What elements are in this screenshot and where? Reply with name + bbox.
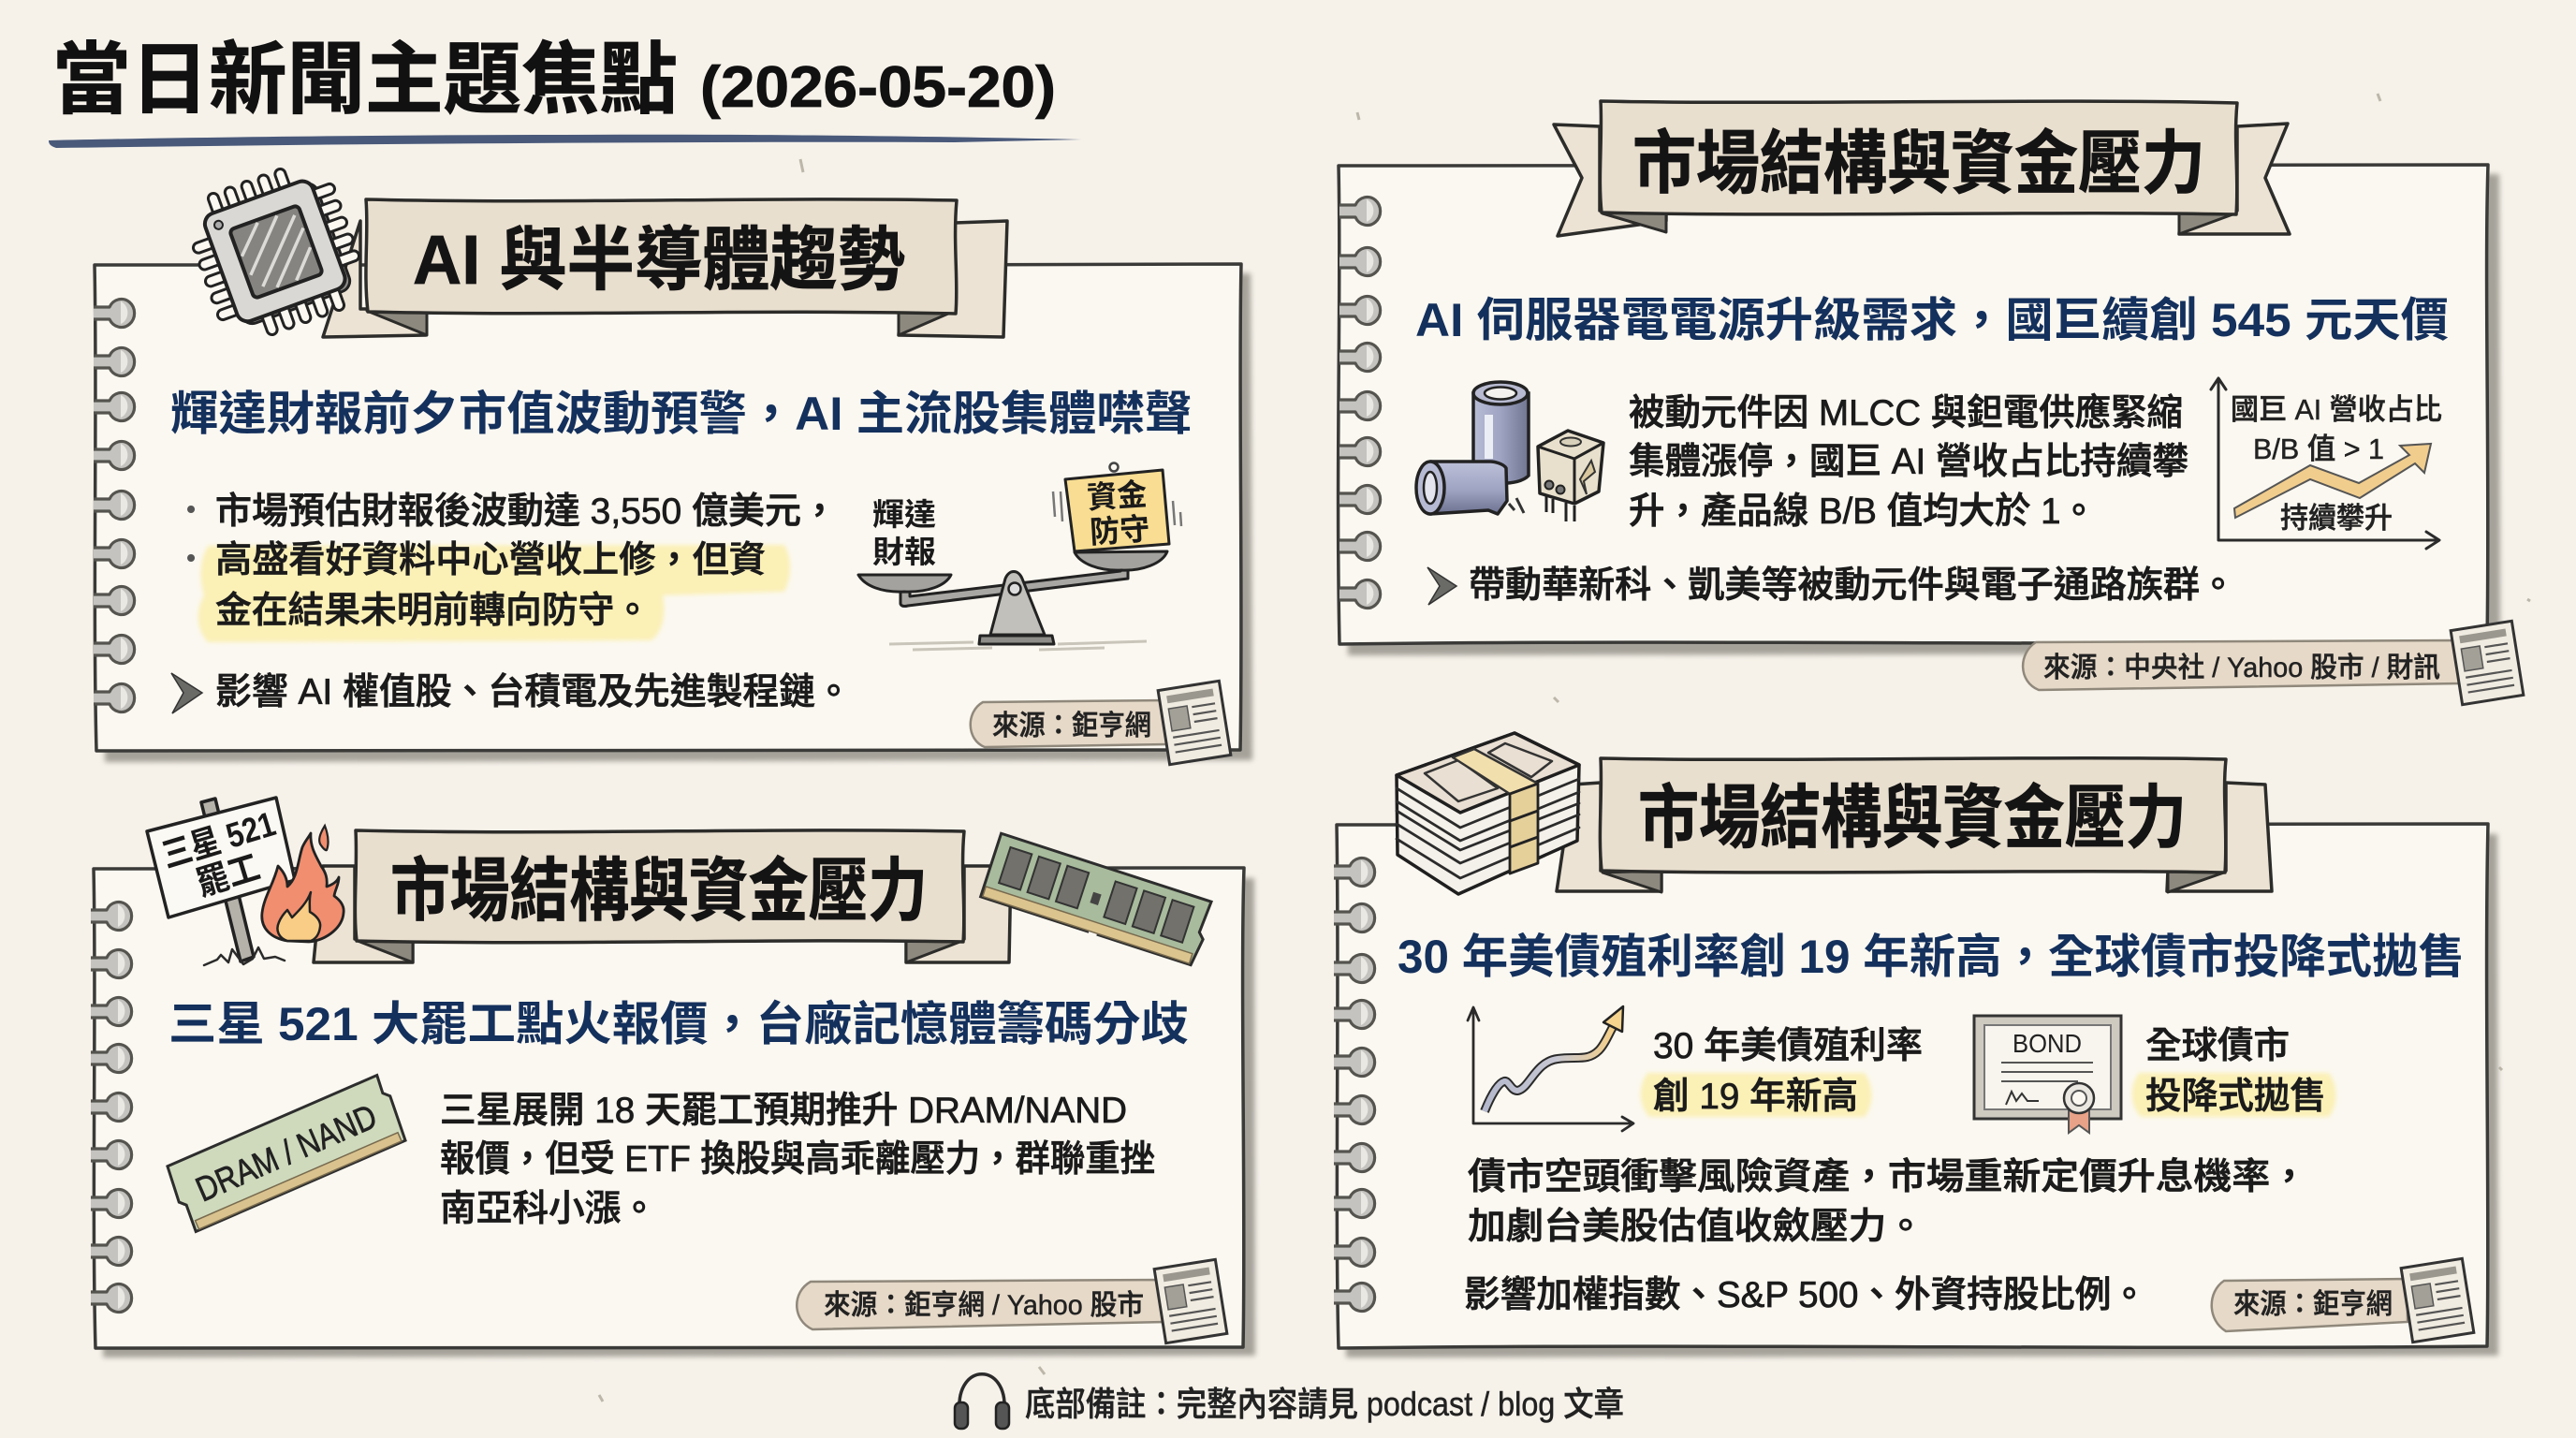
impact line: 影響 AI 權值股、台積電及先進製程鏈。	[215, 672, 852, 712]
highlighted text block: 金在結果未明前轉向防守。	[215, 591, 651, 631]
highlighted text block: 高盛看好資料中心營收上修，但資	[215, 540, 766, 580]
callout: capitulation: 投降式拋售	[2145, 1077, 2326, 1117]
icon: balance scale: 財報	[872, 535, 936, 569]
yellow highlight	[198, 545, 790, 642]
body text: 南亞科小漲。	[440, 1189, 657, 1229]
highlighted text block	[187, 492, 838, 642]
mini chart: 持續攀升: B/B 值 > 1	[2253, 433, 2384, 465]
panel: market structure, passive components	[1339, 101, 2524, 705]
body text	[440, 1091, 1155, 1229]
impact line: 影響加權指數、S&P 500、外資持股比例。	[1464, 1275, 2147, 1315]
icon: balance scale: 輝達	[872, 497, 936, 532]
body text: 集體漲停，國巨 AI 營收占比持續攀	[1629, 442, 2188, 482]
icon: DRAM / NAND card: DRAM / NAND	[190, 1097, 382, 1209]
body text: 報價，但受 ETF 換股與高乖離壓力，群聯重挫	[440, 1139, 1155, 1180]
title underline brush stroke	[49, 135, 1081, 148]
icon: DRAM / NAND card	[164, 1074, 409, 1233]
bullet dots	[187, 506, 195, 562]
icon: headphones	[955, 1374, 1009, 1429]
ring binding	[1334, 858, 1375, 1311]
mini chart: 持續攀升: 國巨 AI 營收占比	[2231, 393, 2442, 426]
icon: strike sign: 罷工	[192, 848, 264, 903]
body text: 升，產品線 B/B 值均大於 1。	[1629, 492, 2097, 532]
impact line: 帶動華新科、凱美等被動元件與電子通路族群。	[1469, 565, 2236, 606]
footer note: 底部備註：完整內容請見 podcast / blog 文章	[1025, 1385, 1624, 1423]
callout: yield high: 30 年美債殖利率	[1653, 1026, 1923, 1066]
note: 資金防守: 防守	[1089, 511, 1150, 550]
banner: 市場結構與資金壓力: 市場結構與資金壓力	[1632, 125, 2205, 202]
body text: 加劇台美股估值收斂壓力。	[1468, 1207, 1925, 1247]
highlighted text block: 市場預估財報後波動達 3,550 億美元，	[215, 492, 838, 532]
banner: 市場結構與資金壓力: 市場結構與資金壓力	[1638, 779, 2187, 857]
icon: RAM module	[981, 833, 1215, 966]
yield chart	[1468, 1006, 1633, 1131]
panel: AI and semiconductor trends	[94, 154, 1252, 765]
icon: balance scale	[858, 462, 1181, 650]
source tag: 來源：中央社 / Yahoo 股市 / 財訊	[2043, 653, 2440, 683]
icon: bond certificate: BOND	[2012, 1029, 2082, 1058]
footer note	[955, 1374, 1624, 1429]
body text: 三星展開 18 天罷工預期推升 DRAM/NAND	[440, 1091, 1127, 1131]
title: 當日新聞主題焦點	[52, 36, 678, 124]
source tag	[2212, 1258, 2474, 1343]
title: (2026-05-20)	[700, 55, 1056, 120]
icon: strike sign: 三星 521	[157, 804, 280, 875]
ring binding	[94, 300, 135, 712]
source tag: 來源：鉅亨網 / Yahoo 股市	[824, 1290, 1144, 1321]
source tag: 來源：鉅亨網	[992, 711, 1151, 741]
subheading: 30 年美債殖利率創 19 年新高，全球債市投降式拋售	[1398, 931, 2465, 983]
source tag	[971, 681, 1231, 765]
icon: capacitors	[1416, 382, 1603, 521]
banner: 市場結構與資金壓力	[1554, 101, 2290, 236]
callout: yield high: 創 19 年新高	[1653, 1077, 1858, 1117]
body text	[1629, 393, 2188, 532]
title	[52, 36, 1056, 124]
banner: AI 與半導體趨勢	[323, 199, 1007, 337]
body text: 債市空頭衝擊風險資產，市場重新定價升息機率，	[1468, 1157, 2308, 1197]
banner: AI 與半導體趨勢: AI 與半導體趨勢	[413, 221, 905, 299]
callout: capitulation	[2132, 1026, 2336, 1117]
banner: 市場結構與資金壓力	[1557, 758, 2272, 892]
panel: Samsung strike, memory	[91, 798, 1255, 1357]
banner: 市場結構與資金壓力	[314, 830, 1011, 962]
icon: strike sign	[147, 798, 295, 965]
callout: yield high	[1641, 1026, 1923, 1117]
panel: 30-year treasury yield	[1334, 733, 2498, 1357]
banner: 市場結構與資金壓力: 市場結構與資金壓力	[390, 852, 928, 930]
ring binding	[91, 902, 132, 1313]
icon: stack of banknotes	[1397, 733, 1579, 894]
mini chart: 持續攀升: 持續攀升	[2280, 502, 2393, 535]
note: 資金防守	[1053, 470, 1181, 551]
icon: bond certificate	[1974, 1016, 2121, 1133]
callout: capitulation: 全球債市	[2145, 1026, 2290, 1066]
source tag	[797, 1259, 1227, 1343]
source tag	[2023, 621, 2524, 705]
mini chart: 持續攀升	[2211, 378, 2442, 549]
subheading: AI 伺服器電電源升級需求，國巨續創 545 元天價	[1415, 294, 2449, 346]
body text: 被動元件因 MLCC 與鉭電供應緊縮	[1629, 393, 2183, 433]
icon: CPU chip	[178, 154, 374, 350]
subheading: 輝達財報前夕市值波動預警，AI 主流股集體噤聲	[170, 388, 1193, 440]
ring binding	[1339, 197, 1381, 609]
note: 資金防守: 資金	[1086, 477, 1148, 515]
icon: flame	[262, 826, 344, 942]
subheading: 三星 521 大罷工點火報價，台廠記憶體籌碼分歧	[168, 998, 1189, 1050]
body text	[1468, 1157, 2308, 1247]
source tag: 來源：鉅亨網	[2233, 1289, 2393, 1320]
